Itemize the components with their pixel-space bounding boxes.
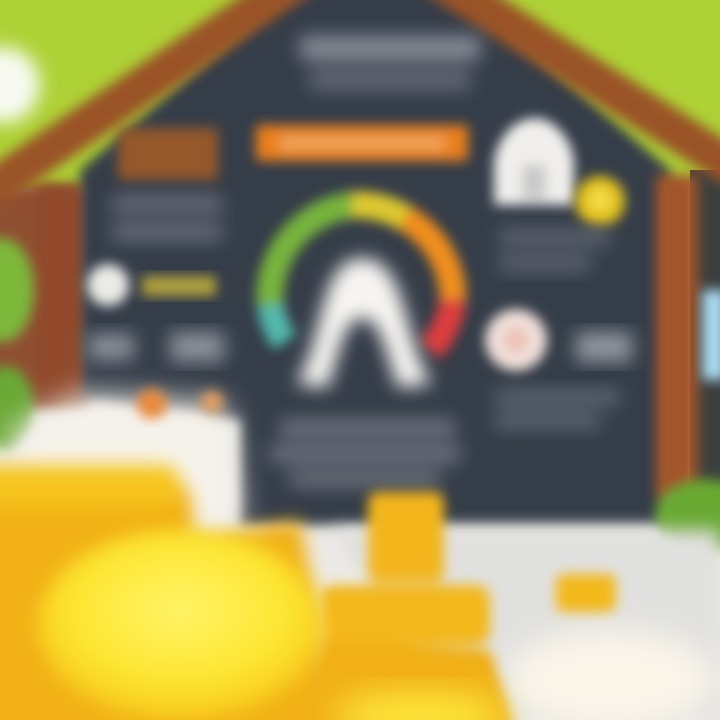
coin stack: left <box>0 465 340 720</box>
ground pavement <box>330 530 720 720</box>
left stats <box>88 332 224 362</box>
right lower text <box>495 390 620 428</box>
bushes <box>0 238 720 551</box>
icon: white badge <box>87 264 129 306</box>
icon: yellow coin <box>575 176 625 226</box>
left side wall <box>0 185 90 410</box>
white paper stack at left <box>0 395 240 530</box>
left heading <box>118 128 218 180</box>
right text <box>500 230 610 270</box>
large coin <box>38 530 322 720</box>
icon: pink circle <box>485 309 547 371</box>
coin glow bottom <box>335 691 505 720</box>
gauge caption text <box>270 420 460 486</box>
roof <box>0 0 720 200</box>
house wall <box>80 0 670 525</box>
chart: semicircular gauge <box>270 205 453 350</box>
panel: right column <box>485 118 632 428</box>
right stat <box>576 332 632 362</box>
wooden posts <box>36 175 698 500</box>
side window <box>702 290 720 380</box>
coin stack: center <box>300 492 515 720</box>
icon: white house <box>494 118 574 205</box>
white plate bottom right <box>505 630 715 720</box>
orange accents <box>137 389 223 419</box>
yellow value label <box>142 276 216 296</box>
panel: left column <box>87 128 224 362</box>
heading text: top <box>300 36 480 90</box>
small coin on ground <box>556 574 616 612</box>
icon: white house arch in gauge <box>296 258 432 388</box>
cloud <box>0 47 40 123</box>
orange title banner <box>256 125 468 161</box>
left text block <box>112 196 222 240</box>
